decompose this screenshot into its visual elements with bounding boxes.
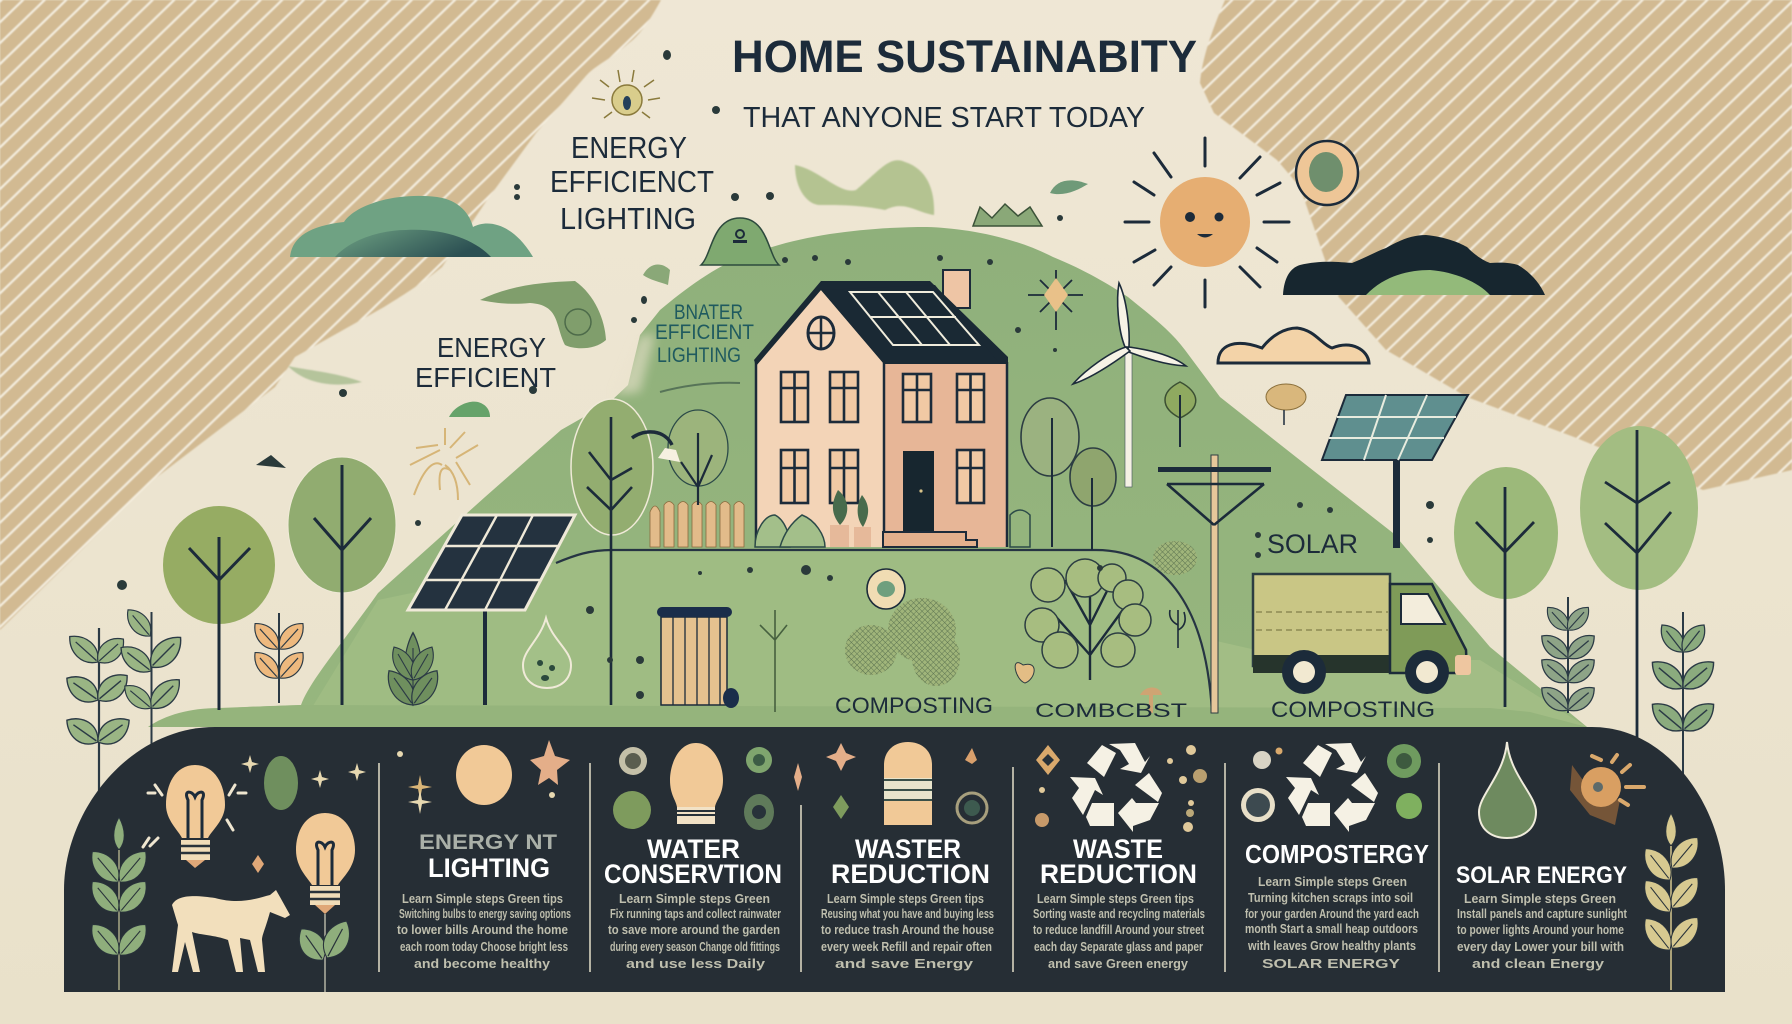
round window <box>808 317 834 349</box>
small sun doodle <box>592 70 660 118</box>
body text: column six <box>1457 891 1628 971</box>
body text: column six: every day Lower your bill with <box>1457 939 1624 954</box>
panel icon: egg bulb and star <box>456 740 570 805</box>
lower left hill crest <box>660 383 740 392</box>
plant: left C orange <box>249 613 309 703</box>
cloud: green left <box>290 196 533 257</box>
faded leaf shape <box>795 160 934 215</box>
light bulb two <box>292 813 357 992</box>
title: HOME SUSTAINABITY <box>732 31 1197 82</box>
body text: column four <box>1033 891 1205 971</box>
label: solar: SOLAR <box>1267 529 1358 559</box>
sun <box>1125 138 1289 307</box>
label: energy efficient lighting: ENERGY <box>571 130 687 165</box>
sapling: near truck <box>1170 610 1185 648</box>
small green doodles <box>449 180 1088 417</box>
heading: water conservation: CONSERVTION <box>604 859 782 889</box>
ring icon <box>1296 141 1358 205</box>
body text: column four: to reduce landfill Around your street <box>1033 922 1205 937</box>
firework doodle <box>410 428 478 500</box>
heading: water conservation: WATER <box>647 834 740 864</box>
body text: column three: Learn Simple steps Green tips <box>827 891 984 906</box>
panel icon: water drop and burst sun <box>1479 742 1644 838</box>
trash bin <box>657 607 739 708</box>
heading: waster reduction: WASTER <box>855 834 961 864</box>
body text: column three: to reduce trash Around the house <box>821 922 994 937</box>
heading: compostergy: COMPOSTERGY <box>1245 839 1429 869</box>
body text: column three: every week Refill and repair often <box>821 939 992 954</box>
starburst on hill <box>1028 270 1083 330</box>
heading: waste reduction: REDUCTION <box>1040 859 1197 889</box>
sheep <box>172 890 290 972</box>
tree: by fence <box>668 410 728 505</box>
body text: column three: Reusing what you have and buying less <box>821 906 994 921</box>
tree: right one <box>1454 467 1558 707</box>
body text: column five: with leaves Grow healthy plants <box>1247 938 1416 953</box>
striped backdrop: top right <box>1200 0 1792 490</box>
heading: energy lighting <box>419 831 557 883</box>
plant: right B <box>1646 612 1720 790</box>
scattered specks <box>117 50 1434 699</box>
hatched nest <box>1153 541 1197 575</box>
utility pole <box>1158 455 1271 713</box>
trees right of house <box>1021 398 1116 550</box>
body text: column one: Learn Simple steps Green tips <box>402 891 563 906</box>
fence <box>650 502 744 547</box>
body text: column six: Learn Simple steps Green <box>1464 891 1616 906</box>
body text: column five: for your garden Around the yard each <box>1245 906 1419 921</box>
panel icon: bottle and sparkles <box>786 742 987 825</box>
body text: column six: and clean Energy <box>1472 956 1605 971</box>
panel icon: compost recycling symbol with badges <box>1241 743 1422 832</box>
labels: composting: COMBCBST <box>1035 701 1188 722</box>
body text: column five: SOLAR ENERGY <box>1262 956 1400 971</box>
heading: waster reduction: REDUCTION <box>831 859 990 889</box>
heading: energy lighting: LIGHTING <box>428 853 550 883</box>
faded blob: left <box>288 366 362 385</box>
ground strip <box>148 705 1587 727</box>
body text: column one: to lower bills Around the home <box>397 922 568 937</box>
body text: column two: Fix running taps and collect rainwater <box>610 906 781 921</box>
heading: solar energy: SOLAR ENERGY <box>1456 862 1627 889</box>
plant: right A <box>1536 597 1600 717</box>
label: water efficient lighting: EFFICIENT <box>655 321 754 344</box>
circular badge <box>867 569 905 609</box>
lower terrace <box>300 550 1587 727</box>
house <box>754 270 1008 547</box>
body text: column two: during every season Change old fittings <box>610 939 780 954</box>
body text: column two <box>608 891 781 971</box>
garden plant <box>381 633 445 711</box>
body text: column three: and save Energy <box>835 956 974 971</box>
terrace line <box>556 550 1212 713</box>
striped backdrop: top left <box>0 0 661 630</box>
body text: column four: Learn Simple steps Green tips <box>1037 891 1194 906</box>
body text: column five: month Start a small heap outdoors <box>1245 921 1418 936</box>
plant: left A <box>61 628 135 793</box>
roof solar panel <box>850 292 979 345</box>
body text: column four: each day Separate glass and paper <box>1034 939 1203 954</box>
subtitle: THAT ANYONE START TODAY <box>743 102 1145 134</box>
plant: left B <box>115 604 188 747</box>
dome icon <box>701 218 779 265</box>
panel sparkles: column one <box>241 751 555 873</box>
cloud: peach <box>1218 328 1369 363</box>
body text: column one <box>397 891 571 971</box>
tree: right two <box>1580 426 1698 745</box>
labels: composting: COMPOSTING <box>835 693 993 718</box>
dark information panel <box>64 727 1725 992</box>
body text: column four: Sorting waste and recycling materials <box>1033 906 1205 921</box>
tree: left one <box>163 506 275 710</box>
panel icon: recycling symbol with marks <box>1035 743 1207 832</box>
cloud: dark right <box>1283 235 1545 295</box>
body text: column five: Turning kitchen scraps into soil <box>1248 890 1413 905</box>
house walls <box>756 290 1007 547</box>
round-canopy tree <box>1025 559 1151 680</box>
heading: waste reduction: WASTE <box>1073 834 1163 864</box>
column separators <box>379 763 1439 972</box>
heading: waste reduction <box>1040 834 1197 889</box>
label: energy efficient: ENERGY <box>437 332 546 363</box>
body text: column six: to power lights Around your home <box>1457 922 1624 937</box>
heading: water conservation <box>604 834 782 889</box>
steps <box>883 532 977 547</box>
hill left edge fade <box>615 335 655 395</box>
body text: column one: each room today Choose bright less <box>400 939 568 954</box>
panel plant: right <box>1637 813 1706 990</box>
body text: column five <box>1245 874 1419 971</box>
street lamp <box>632 432 680 462</box>
doodle: tan <box>1266 384 1306 425</box>
label: energy efficient lighting <box>550 130 714 236</box>
panel plant: left <box>84 817 154 990</box>
main green hill <box>150 227 1587 727</box>
panel icon: water bulb and badges <box>613 743 774 830</box>
tree: left two <box>288 457 396 705</box>
label: energy efficient lighting: LIGHTING <box>560 201 696 236</box>
water drop <box>523 618 571 688</box>
label: energy efficient <box>415 332 556 393</box>
delivery truck <box>1253 574 1471 694</box>
body text: column four: and save Green energy <box>1048 956 1189 971</box>
label: water efficient lighting: LIGHTING <box>657 344 741 367</box>
body text: column six: Install panels and capture sunlight <box>1457 906 1628 921</box>
body text: column two: Learn Simple steps Green <box>619 891 770 906</box>
wind turbine <box>1073 283 1186 487</box>
small tree doodle on hill <box>1165 382 1196 447</box>
solar panel: left <box>408 515 575 705</box>
label: water efficient lighting: BNATER <box>674 301 743 324</box>
roof <box>754 281 1008 366</box>
light bulb one <box>143 765 246 868</box>
labels: composting <box>835 693 1435 722</box>
chimney <box>943 270 970 308</box>
door <box>903 451 934 532</box>
potted plants <box>830 490 871 547</box>
heading: waster reduction <box>831 834 990 889</box>
label: energy efficient lighting: EFFICIENCT <box>550 164 714 199</box>
blob with spiral <box>480 281 606 348</box>
body text: column two: and use less Daily <box>626 956 766 971</box>
tree: on hill <box>571 399 653 705</box>
body text: column one: Switching bulbs to energy saving options <box>399 906 571 921</box>
panel leaf icon <box>264 756 298 810</box>
body text: column one: and become healthy <box>414 956 551 971</box>
labels: composting: COMPOSTING <box>1271 697 1435 722</box>
mushrooms and flower <box>1015 663 1162 713</box>
body text: column two: to save more around the garden <box>608 922 780 937</box>
bushes <box>755 510 1030 547</box>
windows <box>781 372 984 503</box>
heading: energy lighting: ENERGY NT <box>419 831 557 854</box>
body text: column five: Learn Simple steps Green <box>1258 874 1407 889</box>
body text: column three <box>821 891 994 971</box>
solar panel: right <box>1322 395 1468 548</box>
hatched bushes <box>845 598 960 686</box>
label: water efficient lighting <box>655 301 754 367</box>
label: energy efficient: EFFICIENT <box>415 362 556 393</box>
sapling <box>760 610 787 712</box>
